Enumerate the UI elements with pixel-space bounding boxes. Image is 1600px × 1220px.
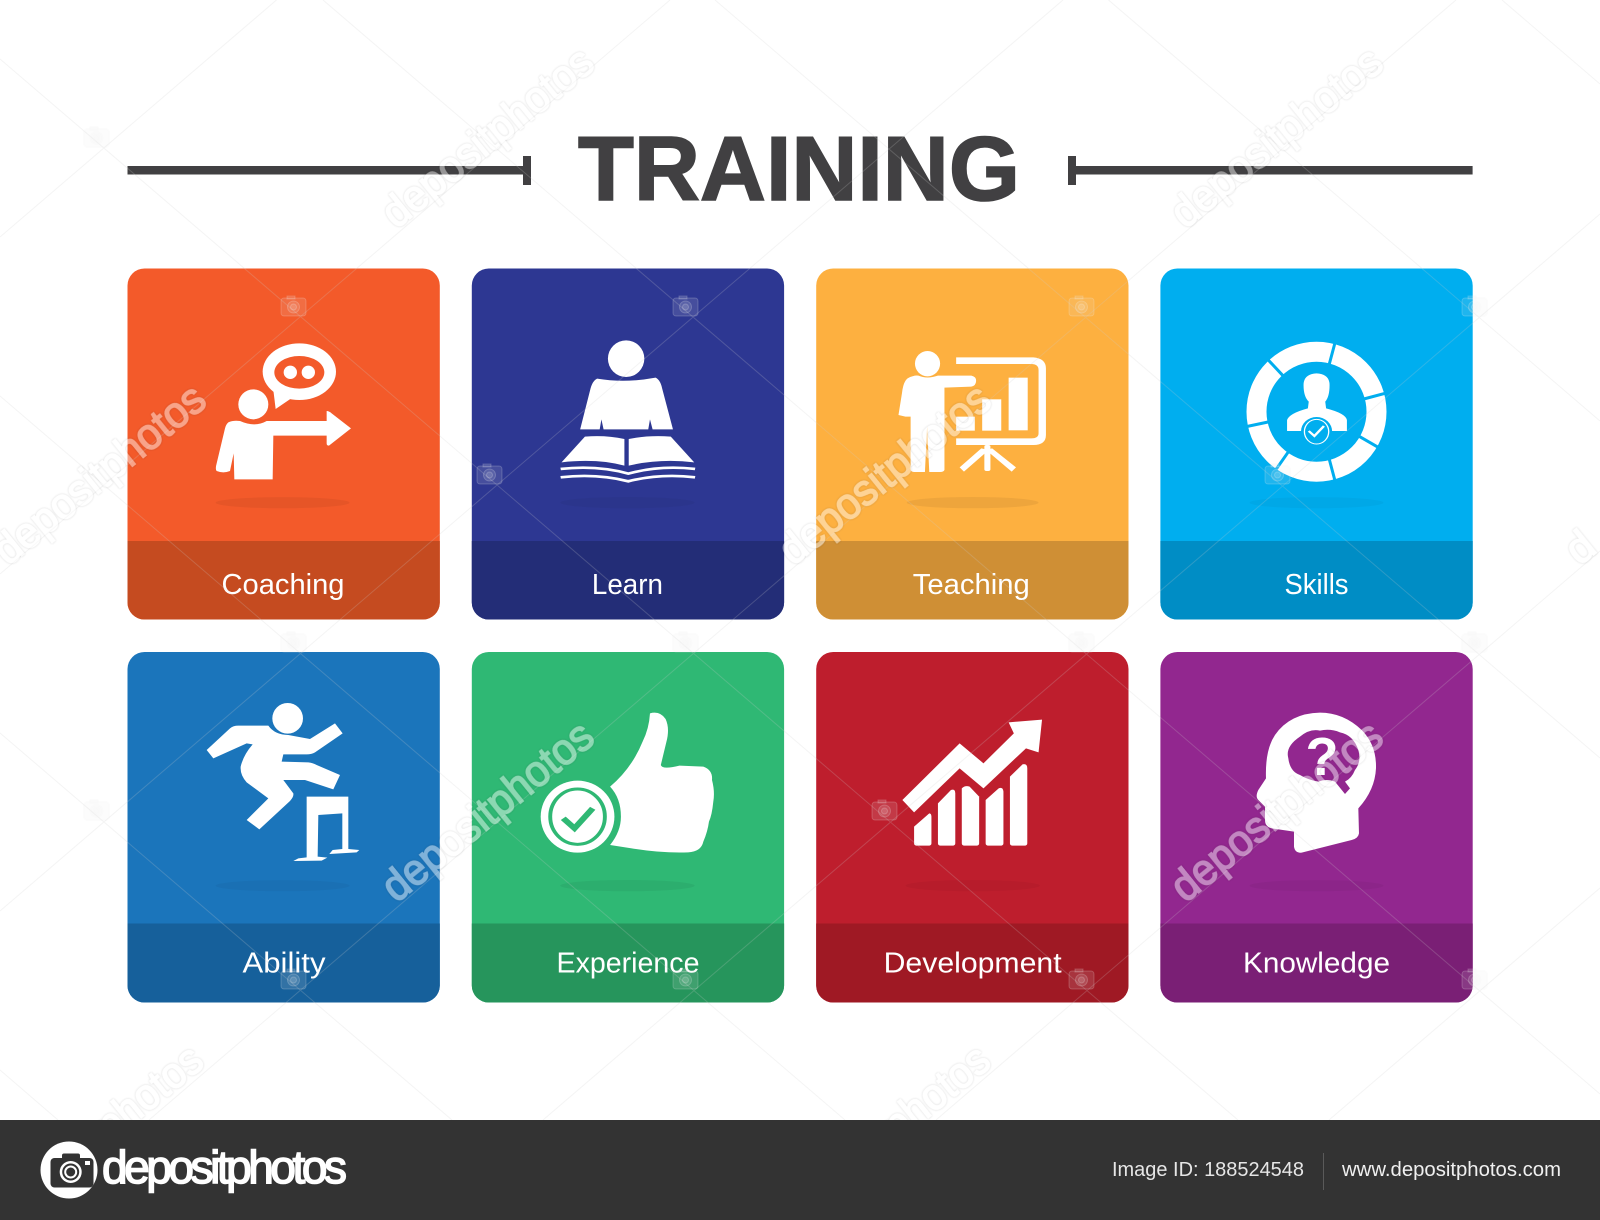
watermark: depositphotos repeats: depositphotos [769, 374, 1000, 574]
icon: rising bar chart with arrow [902, 720, 1042, 891]
label: Teaching: Teaching [913, 569, 1030, 601]
label: Coaching: Coaching [222, 569, 344, 601]
label: Experience: Experience [556, 948, 700, 980]
panel: Development [816, 652, 1128, 1002]
panel: Experience [472, 652, 784, 1002]
title: TRAINING: TRAINING [578, 119, 1020, 220]
label: Knowledge: Knowledge [1243, 948, 1390, 980]
icon: person reading a book [560, 340, 695, 508]
image id: Image ID: 188524548 [1112, 1159, 1304, 1181]
watermark: depositphotos repeats: depositphotos [1161, 37, 1392, 237]
label: Ability: Ability [242, 948, 326, 980]
watermark: depositphotos repeats: depositphotos [1161, 711, 1392, 911]
panel: Teaching [816, 268, 1128, 620]
watermark: depositphotos repeats: depositphotos [372, 711, 603, 911]
icon: thumbs up with check badge [541, 713, 714, 891]
panel: Learn [472, 268, 784, 620]
watermark: depositphotos repeats: depositphotos [372, 37, 603, 237]
shadow under knowledge icon [1250, 880, 1384, 891]
shadow under coaching icon [216, 497, 350, 508]
label: Skills: Skills [1284, 569, 1348, 601]
shadow under ability icon [216, 880, 350, 891]
label: Learn: Learn [592, 569, 663, 601]
footer bar [0, 1120, 1600, 1220]
icon: runner jumping over hurdle [207, 703, 359, 861]
icon: head with brain and question mark [1257, 713, 1376, 853]
panel: Knowledge [1160, 652, 1473, 1002]
icon: depositphotos camera logo [40, 1142, 98, 1198]
watermark: depositphotos repeats: photos [86, 1035, 212, 1150]
website url: www.depositphotos.com [1341, 1159, 1561, 1181]
watermark: depositphotos repeats: photos [873, 1035, 999, 1150]
panel: Skills [1160, 268, 1473, 620]
title rule: left [128, 156, 531, 185]
label: Development: Development [884, 948, 1062, 980]
panel: Ability [128, 652, 440, 1002]
logo wordmark: depositphotos [102, 1141, 347, 1193]
panel: Coaching [128, 268, 440, 620]
watermark: small camera marks [84, 127, 1487, 989]
icon: presenter at chart board [898, 351, 1046, 508]
icon: head with brain and question mark: ? [1306, 727, 1338, 787]
icon: coach pointing with speech bubble [216, 343, 351, 479]
icon: segmented ring with person and check [1245, 341, 1387, 508]
title rule: right [1068, 156, 1473, 185]
